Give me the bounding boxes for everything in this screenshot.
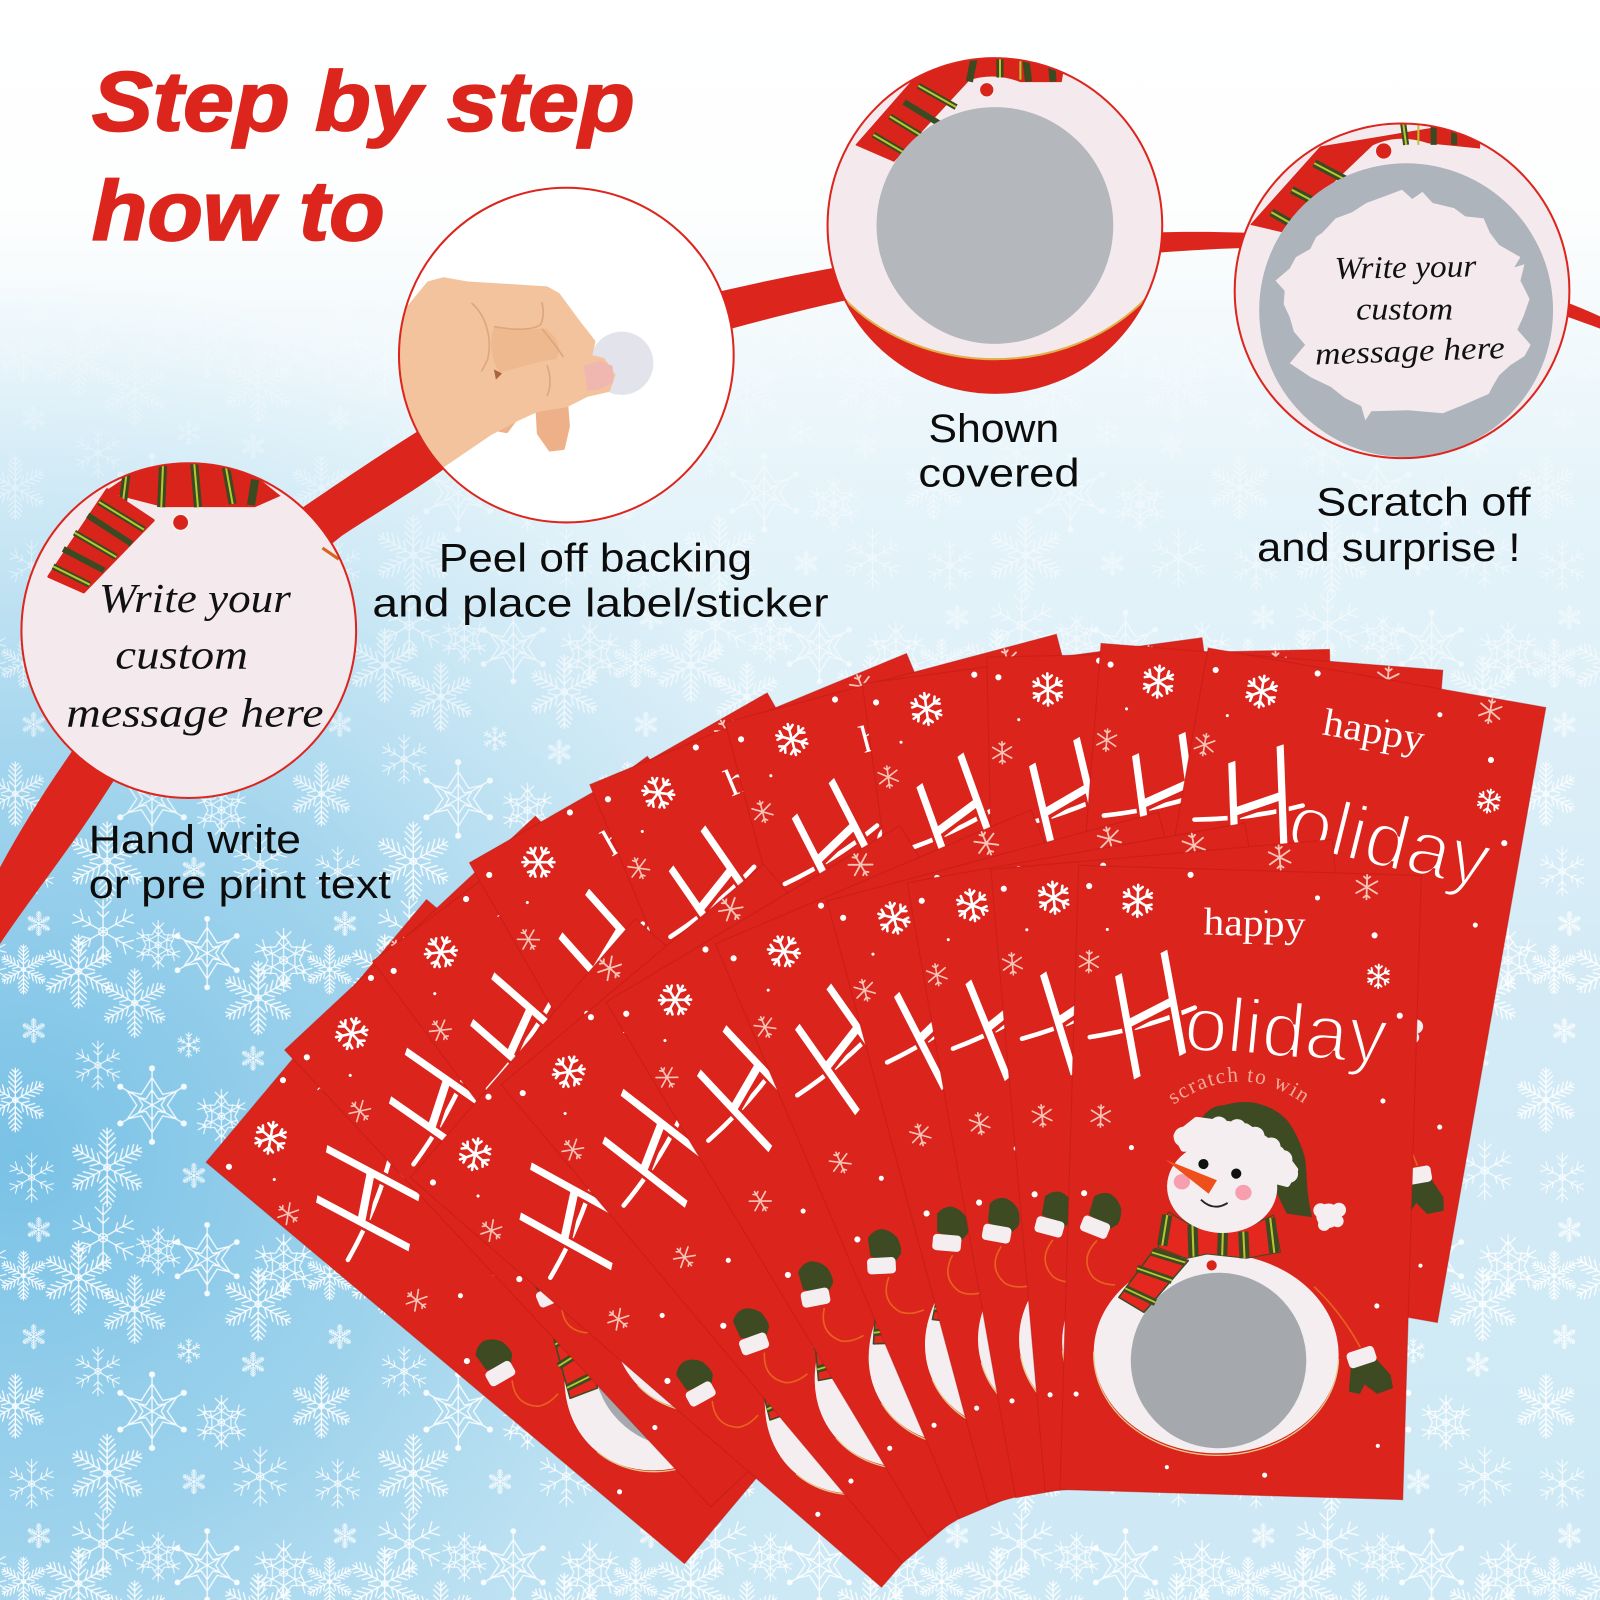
label: step 1: Hand write bbox=[89, 818, 301, 862]
scratched area bbox=[1276, 190, 1531, 420]
step 1 circle: hand written message: message here bbox=[66, 691, 323, 736]
step 2 circle: hand peeling sticker bbox=[399, 188, 734, 522]
back row of scratch cards: happy bbox=[1114, 683, 1218, 729]
front row of scratch cards: H bbox=[540, 1041, 766, 1275]
front row of scratch cards: happy bbox=[957, 872, 1068, 940]
back row of scratch cards: oliday bbox=[361, 991, 567, 1212]
label: step 3: Shown bbox=[929, 407, 1059, 451]
front row of scratch cards: H bbox=[455, 1113, 689, 1340]
step 4 circle: scratched reveal bbox=[1235, 120, 1569, 458]
back row of scratch cards: oliday bbox=[619, 803, 846, 988]
back row of scratch cards: H bbox=[252, 1095, 486, 1321]
back row of scratch cards: H bbox=[993, 710, 1126, 909]
front row of scratch cards: happy bbox=[1120, 881, 1226, 932]
front row of scratch cards: oliday bbox=[960, 927, 1186, 1071]
step 1 circle: hand written message: custom bbox=[115, 632, 248, 677]
back row of scratch cards: H bbox=[410, 926, 631, 1161]
back row of scratch cards: oliday bbox=[1097, 762, 1308, 860]
back row of scratch cards: H bbox=[1169, 703, 1330, 920]
label: step 3 bbox=[918, 407, 1080, 496]
scratch-off silver circle bbox=[877, 107, 1113, 344]
front row of scratch cards: H bbox=[922, 914, 1083, 1130]
front row of scratch cards: oliday bbox=[858, 923, 1087, 1091]
card text: happy: happy bbox=[1203, 900, 1307, 946]
back row of scratch cards: happy bbox=[493, 849, 601, 945]
back row of scratch cards: oliday bbox=[732, 767, 961, 933]
back row of scratch cards: H bbox=[326, 999, 555, 1231]
back row of scratch cards: H bbox=[744, 742, 919, 965]
front row of scratch cards: oliday bbox=[656, 967, 876, 1173]
front row of scratch cards: oliday bbox=[1108, 953, 1324, 1065]
back row of scratch cards: happy bbox=[992, 684, 1099, 740]
back row of scratch cards: happy bbox=[595, 776, 705, 865]
title: Step by step bbox=[92, 54, 635, 149]
label: step 2 bbox=[372, 536, 829, 625]
front row of scratch cards bbox=[410, 810, 1387, 1587]
front row of scratch cards: H bbox=[741, 943, 937, 1174]
card text: Holiday: H bbox=[1076, 921, 1211, 1122]
back row of scratch cards: oliday bbox=[984, 752, 1204, 873]
step 1 circle: hand written message bbox=[20, 459, 357, 806]
card text: scratch to win: scratch to win bbox=[1170, 1067, 1307, 1104]
back row of scratch cards bbox=[206, 634, 1546, 1564]
step 3 circle: shown covered bbox=[826, 57, 1164, 394]
top front card with snowman bbox=[1060, 865, 1422, 1500]
back row of scratch cards: happy bbox=[311, 1007, 410, 1113]
title: how to bbox=[92, 163, 385, 258]
label: step 2: Peel off backing bbox=[439, 536, 752, 580]
front row of scratch cards: H bbox=[639, 981, 851, 1216]
back row of scratch cards: oliday bbox=[440, 916, 656, 1127]
label: step 1: or pre print text bbox=[89, 863, 391, 907]
label: step 1 bbox=[89, 818, 391, 907]
front row of scratch cards: happy bbox=[731, 911, 841, 1001]
back row of scratch cards: H bbox=[1086, 699, 1230, 906]
label: step 2: and place label/sticker bbox=[372, 581, 829, 625]
label: step 4 bbox=[1257, 480, 1532, 570]
back row of scratch cards: happy bbox=[1221, 685, 1327, 735]
front row of scratch cards: H bbox=[1001, 913, 1146, 1120]
back row of scratch cards: oliday bbox=[526, 862, 749, 1061]
front row of scratch cards: happy bbox=[1037, 874, 1146, 934]
back row of scratch cards: happy bbox=[719, 726, 830, 805]
back row of scratch cards: H bbox=[501, 845, 711, 1080]
front row of scratch cards: happy bbox=[844, 883, 955, 963]
card text: Holiday: oliday bbox=[1180, 980, 1392, 1080]
label: step 4: Scratch off bbox=[1316, 480, 1532, 524]
step 4 circle: scratched reveal: Write your bbox=[1334, 248, 1477, 286]
label: step 3: covered bbox=[918, 452, 1080, 496]
step 4 circle: scratched reveal: custom bbox=[1356, 291, 1453, 326]
front row of scratch cards: happy bbox=[517, 1025, 617, 1131]
step 1 circle: hand written message: Write your bbox=[99, 576, 291, 621]
back row of scratch cards: happy bbox=[1320, 701, 1428, 761]
front row of scratch cards: oliday bbox=[565, 1012, 773, 1231]
front row of scratch cards: oliday bbox=[756, 935, 983, 1122]
title bbox=[92, 54, 635, 258]
back row of scratch cards: oliday bbox=[1279, 777, 1501, 905]
back row of scratch cards: H bbox=[875, 721, 1029, 933]
front row of scratch cards: H bbox=[846, 920, 1022, 1144]
front row of scratch cards: happy bbox=[618, 961, 724, 1060]
front row of scratch cards: oliday bbox=[1033, 938, 1255, 1066]
back row of scratch cards: H bbox=[616, 785, 810, 1016]
step 4 circle: scratched reveal: message here bbox=[1314, 330, 1505, 372]
back row of scratch cards: happy bbox=[399, 917, 503, 1018]
label: step 4: and surprise ! bbox=[1257, 526, 1520, 570]
back row of scratch cards: oliday bbox=[858, 749, 1084, 893]
back row of scratch cards: oliday bbox=[1193, 763, 1408, 873]
arc ribbon connecting the steps bbox=[0, 232, 1600, 944]
snowflake pattern bbox=[0, 406, 1600, 1600]
back row of scratch cards: happy bbox=[855, 694, 966, 762]
